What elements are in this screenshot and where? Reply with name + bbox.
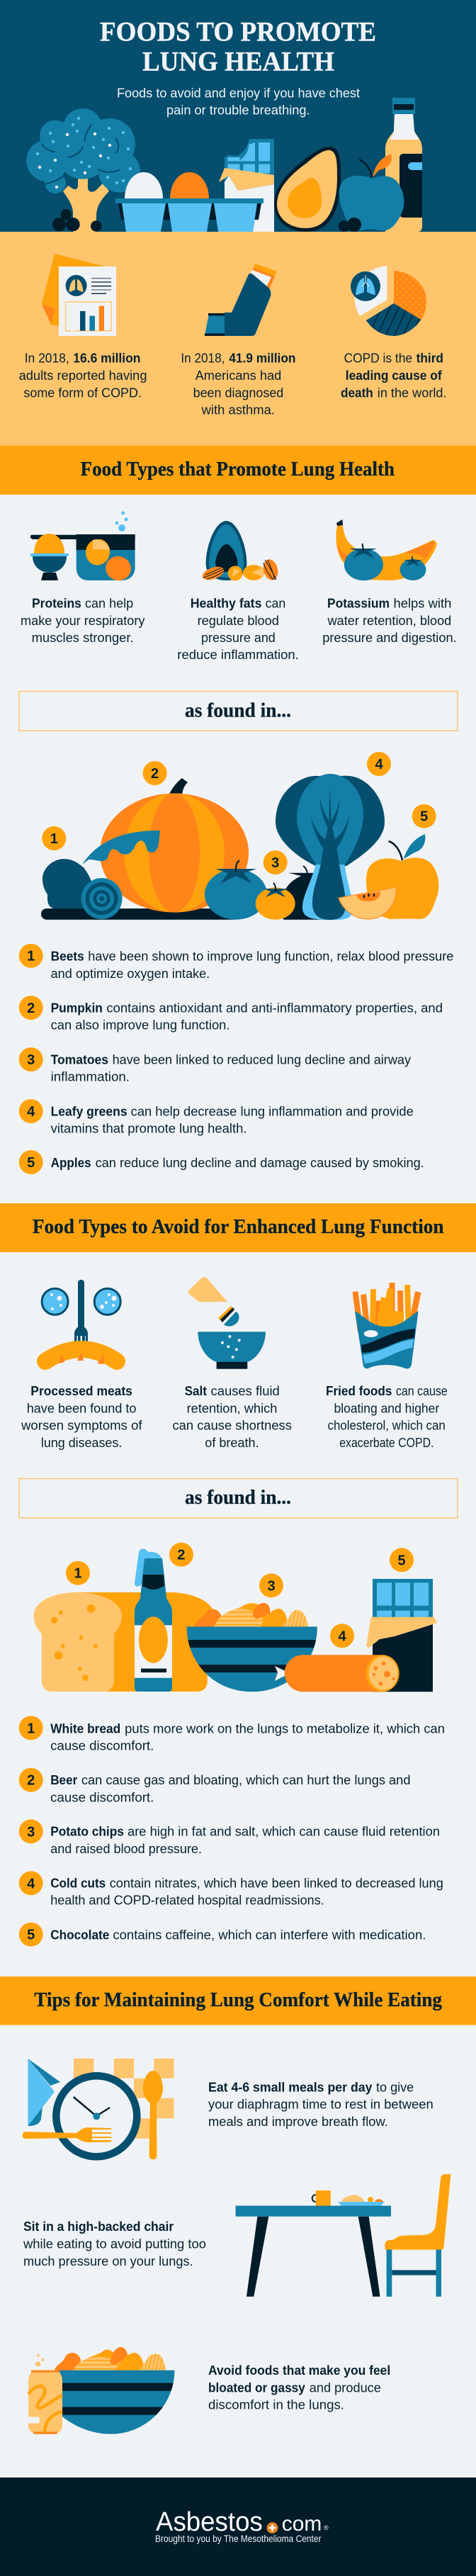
- callout: as found in (avoid): [19, 1478, 458, 1518]
- number badges: 1: [50, 831, 58, 847]
- item: chocolate: contains caffeine, which can interfere with medication.: [113, 1927, 426, 1942]
- subtitle: Foods to avoid and enjoy if you have chest: [117, 85, 360, 100]
- icon: french fries: [353, 1283, 421, 1368]
- stat: asthma: In 2018,: [181, 351, 225, 366]
- text: healthy fats: pressure and: [201, 630, 276, 645]
- text: tip avoid bloating foods: discomfort in the lungs.: [208, 2397, 344, 2412]
- item: tomatoes: [19, 1047, 412, 1084]
- logo: Asbestos.com: Brought to you by The Mesothelioma Center: [155, 2533, 322, 2544]
- text: fried foods: cholesterol, which can: [327, 1418, 446, 1433]
- item: beets: Beets: [51, 949, 84, 964]
- item: beer: [19, 1768, 410, 1804]
- heading: food types to avoid: [0, 1203, 476, 1252]
- item: tomatoes: Tomatoes: [51, 1052, 108, 1067]
- text: proteins: Proteins: [32, 596, 81, 611]
- panel: footer: [0, 2477, 476, 2576]
- item: white bread: 1: [27, 1721, 35, 1736]
- item: apples: Apples: [51, 1155, 91, 1170]
- panel: header: [0, 0, 476, 232]
- cold cut sausage: [285, 1655, 400, 1692]
- subtitle: pain or trouble breathing.: [166, 103, 310, 118]
- icon: table and chair: [236, 2174, 450, 2297]
- item: beets: and optimize oxygen intake.: [51, 966, 210, 981]
- stat: COPD adults: 16.6 million: [73, 351, 140, 366]
- text: tip small meals: your diaphragm time to rest in between: [208, 2097, 434, 2112]
- text: tip avoid bloating foods: Avoid foods that make you feel: [208, 2363, 390, 2378]
- icon: clock plate with cutlery: [23, 2059, 174, 2159]
- item: cold cuts: health and COPD-related hospital readmissions.: [50, 1893, 324, 1908]
- title: FOODS TO PROMOTE: [100, 16, 376, 47]
- list: foods to avoid: [19, 1716, 445, 1947]
- text: fried foods: bloating and higher: [334, 1400, 439, 1415]
- text: fried foods: can cause: [396, 1383, 448, 1398]
- logo: Asbestos.com: [155, 2507, 329, 2544]
- pumpkin: [100, 778, 249, 913]
- icon: avocado: [274, 147, 341, 232]
- text: processed meats: worsen symptoms of: [21, 1418, 143, 1433]
- text: healthy fats: Healthy fats: [191, 596, 262, 611]
- text: tip high-backed chair: Sit in a high-backed chair: [23, 2219, 174, 2234]
- item: apples: can reduce lung decline and damage caused by smoking.: [96, 1155, 424, 1170]
- text: proteins: muscles stronger.: [32, 630, 134, 645]
- text: tip small meals: Eat 4-6 small meals per day: [208, 2080, 373, 2095]
- item: potato chips: Potato chips: [50, 1824, 124, 1839]
- stat: asthma: Americans had: [196, 368, 281, 383]
- text: healthy fats: reduce inflammation.: [177, 647, 299, 662]
- item: pumpkin: 2: [27, 1001, 35, 1016]
- item: cold cuts: [19, 1871, 443, 1908]
- stat: asthma: [181, 351, 296, 417]
- item: cold cuts: 4: [27, 1876, 35, 1891]
- text: proteins: [21, 596, 145, 645]
- icon: report document: [42, 254, 116, 336]
- text: healthy fats: [177, 596, 299, 662]
- illustration: healthy foods: [41, 752, 438, 920]
- stat: third leading cause: COPD is the: [344, 351, 412, 366]
- icon: chips bowl and soda can: [28, 2347, 177, 2434]
- number badges: 3: [267, 1578, 276, 1594]
- text: potassium: Potassium: [327, 596, 390, 611]
- icon: chocolate bar: [219, 139, 274, 232]
- item: beer: cause discomfort.: [50, 1789, 154, 1804]
- list: healthy foods: [19, 944, 453, 1174]
- heading: tips: Tips for Maintaining Lung Comfort While Eating: [34, 1989, 442, 2011]
- number badges: 2: [151, 766, 159, 782]
- item: tomatoes: inflammation.: [51, 1069, 130, 1084]
- bread: [34, 1592, 214, 1692]
- stat: third leading cause: death: [341, 385, 373, 400]
- icon: pie chart with lungs: [351, 266, 426, 336]
- stat: third leading cause: in the world.: [378, 385, 446, 400]
- text: tip small meals: meals and improve breath flow.: [208, 2114, 388, 2129]
- stat: COPD adults: adults reported having: [19, 368, 147, 383]
- apple and slice: [339, 834, 438, 919]
- number badges: 4: [338, 1629, 346, 1644]
- text: fried foods: [326, 1383, 448, 1450]
- text: proteins: make your respiratory: [21, 613, 145, 628]
- callout: as found in (avoid): as found in...: [185, 1487, 291, 1509]
- text: tip small meals: to give: [376, 2080, 414, 2095]
- text: potassium: water retention, blood: [327, 613, 451, 628]
- text: potassium: [322, 596, 457, 645]
- text: tip avoid bloating foods: [208, 2363, 390, 2412]
- icon: egg and pot: [30, 512, 135, 583]
- icon: processed meat: [42, 1280, 120, 1364]
- stat: asthma: been diagnosed: [193, 385, 283, 400]
- item: pumpkin: can also improve lung function.: [51, 1018, 230, 1033]
- item: pumpkin: [19, 996, 443, 1033]
- text: tip small meals: [208, 2080, 434, 2129]
- chocolate bar: [366, 1579, 437, 1692]
- item: beets: [19, 944, 453, 981]
- chip bowl: [184, 1603, 319, 1692]
- item: cold cuts: Cold cuts: [50, 1876, 106, 1891]
- text: salt: Salt: [185, 1383, 207, 1398]
- icon: egg carton: [115, 172, 264, 232]
- text: tip avoid bloating foods: and produce: [310, 2380, 381, 2395]
- stat: third leading cause: [341, 351, 446, 400]
- tomatoes: [205, 860, 295, 920]
- text: potassium: pressure and digestion.: [322, 630, 457, 645]
- panel: statistics: [0, 232, 476, 446]
- heading: food types that promote lung health: [0, 446, 476, 495]
- item: white bread: [19, 1716, 445, 1753]
- illustration: foods to avoid: [34, 1543, 437, 1692]
- icon: salt shaker and bowl: [188, 1277, 266, 1369]
- item: pumpkin: Pumpkin: [51, 1000, 103, 1015]
- text: tip high-backed chair: while eating to avoid putting too: [23, 2237, 206, 2251]
- text: processed meats: have been found to: [27, 1400, 137, 1415]
- number badges: 4: [375, 757, 383, 772]
- logo: Asbestos.com: Asbestos: [156, 2507, 263, 2537]
- heading: food types to avoid: Food Types to Avoid for Enhanced Lung Function: [33, 1216, 444, 1238]
- item: leafy greens: Leafy greens: [51, 1103, 128, 1118]
- text: fried foods: Fried foods: [326, 1383, 392, 1398]
- item: beer: Beer: [50, 1772, 77, 1787]
- stat: COPD adults: In 2018,: [25, 351, 69, 366]
- item: tomatoes: have been linked to reduced lung decline and airway: [113, 1052, 412, 1067]
- number badges: [42, 752, 436, 874]
- stat: COPD adults: some form of COPD.: [23, 385, 142, 400]
- item: pumpkin: contains antioxidant and anti-inflammatory properties, and: [106, 1000, 443, 1015]
- logo: Asbestos.com: ®: [324, 2524, 329, 2531]
- item: chocolate: [19, 1923, 426, 1947]
- text: salt: retention, which: [187, 1400, 277, 1415]
- icon: broccoli: [26, 108, 140, 232]
- callout: as found in (promote): [19, 692, 458, 731]
- item: leafy greens: 4: [27, 1104, 35, 1120]
- text: salt: causes fluid: [211, 1383, 280, 1398]
- number badges: 3: [271, 855, 279, 871]
- logo: Asbestos.com: com: [282, 2512, 322, 2536]
- title: LUNG HEALTH: [142, 46, 334, 77]
- text: proteins: can help: [85, 596, 133, 611]
- item: beets: have been shown to improve lung function, relax blood pressure: [88, 949, 453, 964]
- item: cold cuts: contain nitrates, which have been linked to decreased lung: [110, 1876, 443, 1891]
- item: potato chips: 3: [27, 1824, 35, 1840]
- icon: banana and tomatoes: [336, 519, 437, 580]
- item: leafy greens: vitamins that promote lung health.: [51, 1121, 246, 1136]
- text: tip high-backed chair: [23, 2219, 206, 2268]
- item: leafy greens: [19, 1099, 414, 1136]
- number badges: 1: [74, 1566, 82, 1582]
- number badges: 5: [420, 809, 428, 825]
- stat: third leading cause: third: [416, 351, 443, 366]
- item: tomatoes: 3: [27, 1052, 35, 1068]
- number badges: 2: [177, 1548, 185, 1563]
- subtitle: [117, 85, 360, 118]
- callout: as found in (promote): as found in...: [185, 700, 291, 722]
- text: potassium: helps with: [394, 596, 451, 611]
- item: white bread: cause discomfort.: [50, 1738, 154, 1753]
- stat: asthma: with asthma.: [201, 403, 275, 417]
- text: salt: of breath.: [205, 1435, 259, 1450]
- text: healthy fats: can: [266, 596, 285, 611]
- icon: bottle: [385, 98, 422, 232]
- heading: tips: [0, 1976, 476, 2025]
- text: salt: [173, 1383, 292, 1450]
- number badges: 5: [397, 1553, 406, 1568]
- stat: COPD adults: [19, 351, 147, 400]
- text: processed meats: Processed meats: [30, 1383, 132, 1398]
- item: white bread: White bread: [50, 1721, 120, 1736]
- item: beets: 1: [27, 949, 35, 964]
- text: tip avoid bloating foods: bloated or gassy: [208, 2380, 306, 2395]
- item: white bread: puts more work on the lungs to metabolize it, which can: [125, 1721, 445, 1736]
- beet: [42, 831, 160, 919]
- heading: food types that promote lung health: Food Types that Promote Lung Health: [81, 459, 395, 480]
- item: chocolate: 5: [27, 1928, 35, 1943]
- item: potato chips: and raised blood pressure.: [50, 1841, 202, 1856]
- item: potato chips: [19, 1819, 440, 1856]
- item: potato chips: are high in fat and salt, which can cause fluid retention: [128, 1824, 440, 1839]
- icon: apple: [339, 154, 404, 232]
- text: processed meats: [21, 1383, 143, 1450]
- text: healthy fats: regulate blood: [198, 613, 279, 628]
- number badges: [66, 1543, 414, 1648]
- item: apples: [19, 1150, 424, 1174]
- item: leafy greens: can help decrease lung inflammation and provide: [131, 1103, 414, 1118]
- text: fried foods: exacerbate COPD.: [339, 1435, 434, 1450]
- item: chocolate: Chocolate: [50, 1927, 109, 1942]
- text: tip high-backed chair: much pressure on your lungs.: [23, 2254, 193, 2268]
- icon: avocado and nuts: [200, 521, 280, 583]
- beer bottle: [135, 1548, 172, 1692]
- icon: inhaler: [205, 264, 277, 336]
- item: beer: can cause gas and bloating, which can hurt the lungs and: [81, 1772, 411, 1787]
- text: salt: can cause shortness: [173, 1418, 292, 1433]
- stat: third leading cause: leading cause of: [346, 368, 442, 383]
- title: [100, 16, 376, 77]
- item: beer: 2: [27, 1773, 35, 1789]
- leafy greens: [276, 774, 385, 920]
- text: processed meats: lung diseases.: [41, 1435, 122, 1450]
- item: apples: 5: [27, 1155, 35, 1171]
- stat: asthma: 41.9 million: [229, 351, 296, 366]
